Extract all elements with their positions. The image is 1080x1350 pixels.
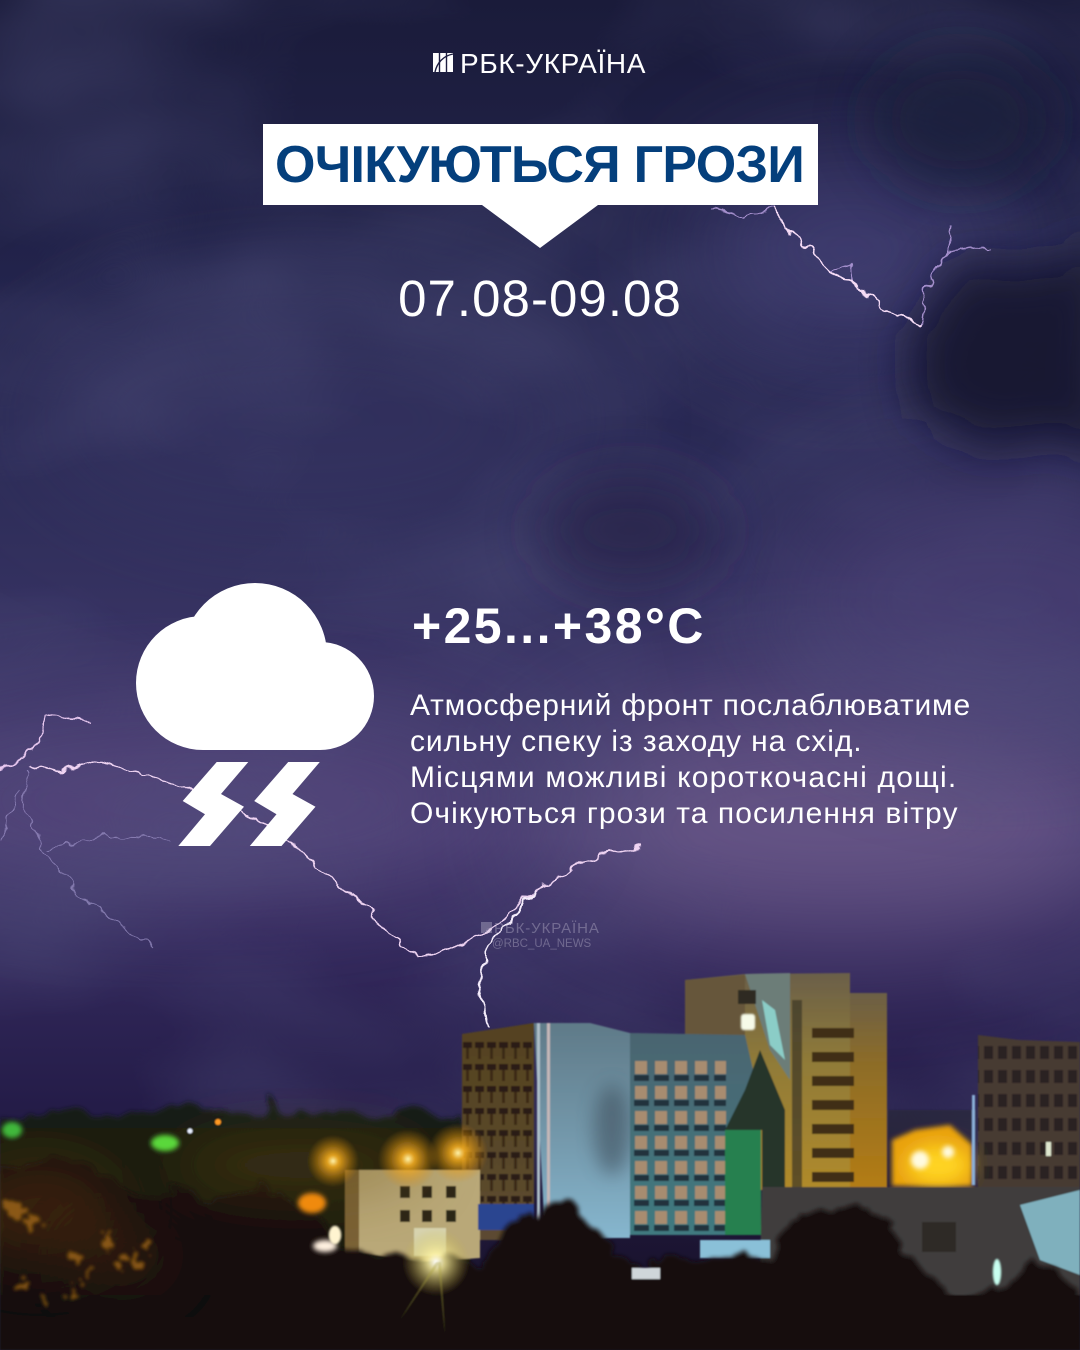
title: ОЧІКУЮТЬСЯ ГРОЗИ (275, 136, 804, 194)
foreground trees (0, 1160, 1080, 1350)
watermark (481, 920, 600, 950)
window block (630, 1033, 760, 1235)
forecast description: Атмосферний фронт послаблюватиме (410, 689, 971, 722)
city skyline with buildings (0, 973, 1080, 1350)
watermark: РБК-УКРАЇНА (494, 920, 600, 937)
warm glow over foliage (170, 1130, 430, 1200)
logo icon (433, 53, 453, 72)
logo (433, 48, 646, 79)
small low building (345, 1170, 480, 1262)
city lights (151, 1135, 179, 1151)
pale wall (534, 1023, 630, 1238)
low long building (760, 1187, 1080, 1310)
forecast description: сильну спеку із заходу на схід. (410, 725, 863, 758)
date range: 07.08-09.08 (398, 270, 682, 327)
watermark: @RBC_UA_NEWS (492, 938, 592, 950)
distant treeline (0, 1094, 465, 1350)
logo wordmark: РБК-УКРАЇНА (460, 48, 646, 79)
forecast description: Місцями можливі короткочасні дощі. (410, 761, 957, 794)
right block (978, 1035, 1080, 1190)
forecast description: Очікуються грози та посилення вітру (410, 797, 959, 830)
tower (685, 973, 887, 1190)
orange glow zone (888, 1110, 976, 1186)
lightning upper right (710, 208, 990, 324)
orange-lit foliage (6, 1201, 150, 1303)
forecast description (410, 689, 971, 830)
lightning left and centre (0, 715, 640, 1027)
temperature: +25...+38°C (412, 598, 706, 654)
left brown block (462, 1023, 534, 1240)
title banner with pointer (263, 124, 818, 248)
